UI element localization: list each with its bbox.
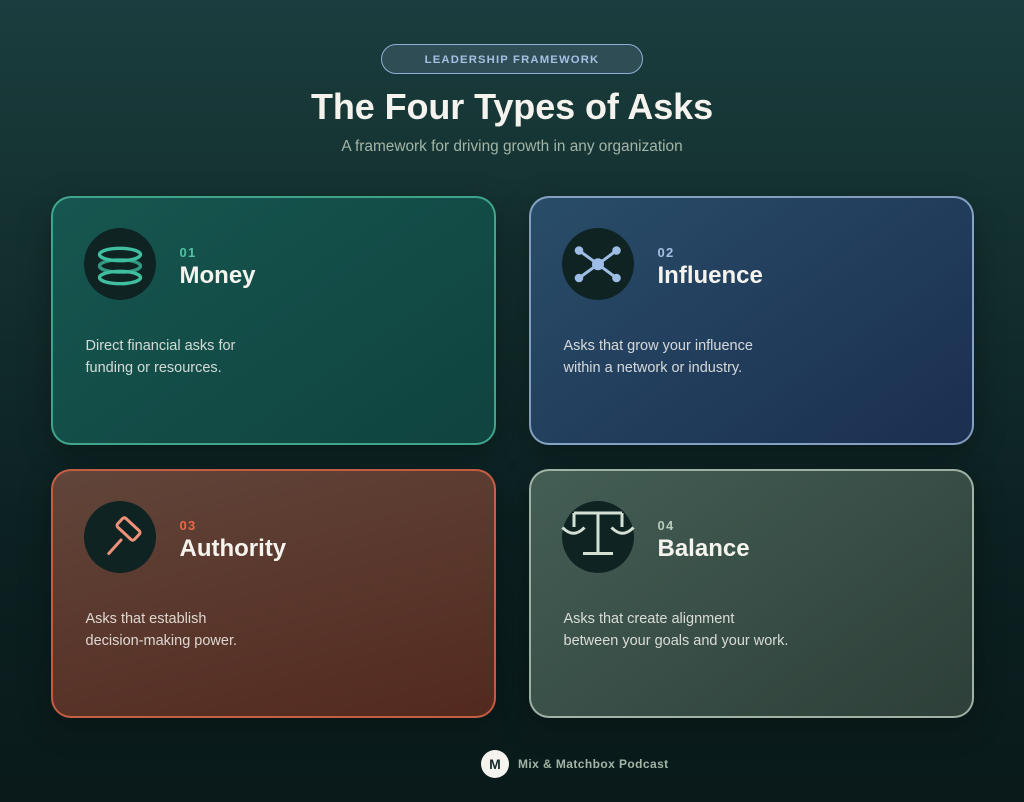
description: [86, 610, 237, 648]
panel: authority: [50, 468, 496, 718]
description: funding or resources.: [86, 360, 222, 376]
subtitle: A framework for driving growth in any organization: [341, 138, 683, 155]
description: Asks that establish: [86, 610, 206, 626]
heading: Money: [180, 262, 256, 288]
number: 03: [180, 518, 197, 532]
panel: money: [50, 196, 496, 444]
panel: balance: [528, 468, 974, 718]
badge: leadership framework: LEADERSHIP FRAMEWORK: [425, 54, 599, 66]
description: [564, 338, 753, 376]
description: Asks that create alignment: [564, 610, 734, 626]
icon: network: [562, 228, 634, 300]
panel: influence: [528, 196, 974, 444]
footer text: Mix & Matchbox Podcast: [518, 757, 669, 771]
number: 04: [658, 518, 675, 532]
description: [564, 610, 788, 648]
description: decision-making power.: [86, 632, 237, 648]
number: 01: [180, 244, 197, 260]
icon: gavel: [84, 501, 156, 573]
number: 02: [658, 244, 675, 260]
description: between your goals and your work.: [564, 632, 788, 648]
icon: coin stack: [84, 228, 156, 300]
footer logo: [481, 750, 509, 778]
footer logo: M: [489, 756, 501, 772]
description: [86, 338, 236, 376]
description: Asks that grow your influence: [564, 338, 753, 354]
title: The Four Types of Asks: [311, 86, 713, 127]
heading: Authority: [180, 534, 286, 562]
heading: Balance: [658, 534, 750, 562]
description: Direct financial asks for: [86, 338, 235, 354]
badge: leadership framework: [381, 44, 643, 74]
heading: Influence: [658, 262, 763, 288]
icon: scales: [562, 501, 634, 573]
description: within a network or industry.: [564, 360, 742, 376]
